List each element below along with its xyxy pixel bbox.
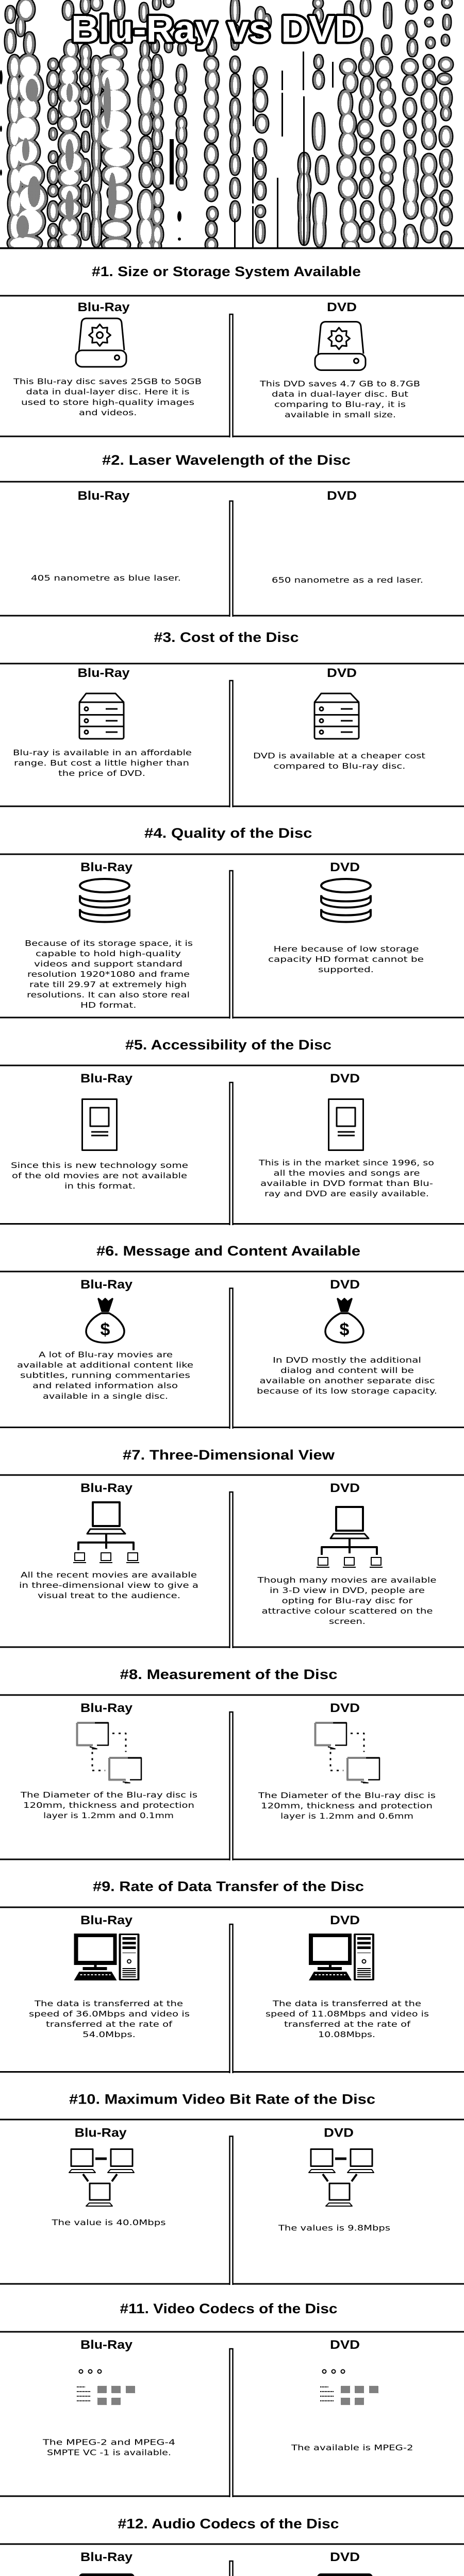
text block: visual treat to the audience.: [38, 1591, 180, 1600]
panel: DVD: [272, 489, 423, 585]
text block: speed of 36.0Mbps and video is: [29, 2009, 190, 2019]
text block: The available is MPEG-2: [291, 2443, 413, 2452]
panel: DVD: [268, 2550, 425, 2576]
heading: #6. Message and Content Available: [96, 1243, 360, 1259]
text block: resolutions. It can also store real: [27, 990, 190, 999]
text block: 120mm, thickness and protection: [23, 1801, 194, 1810]
icon: monitor: [319, 2575, 371, 2576]
text block: The data is transferred at the: [34, 1999, 183, 2008]
panel: Blu-Ray: [31, 2550, 194, 2576]
icon: database: [80, 879, 129, 922]
icon: hard drive: [315, 321, 366, 370]
panel: Blu-Ray: [17, 1278, 193, 1401]
heading: #7. Three-Dimensional View: [123, 1447, 335, 1463]
text block: [259, 379, 420, 419]
text block: capable to hold high-quality: [36, 949, 181, 958]
text block: [253, 751, 425, 771]
text block: supported.: [318, 965, 374, 974]
icon: server: [314, 693, 359, 739]
text block: opting for Blu-ray disc for: [281, 1596, 413, 1605]
section 9: rate of data transfer: [0, 1879, 464, 2073]
text block: [29, 1999, 190, 2039]
text block: 650 nanometre as a red laser.: [272, 575, 423, 585]
column label: Blu-Ray: [80, 1481, 133, 1495]
text block: transferred at the rate of: [284, 2020, 411, 2029]
panel: DVD: [257, 1481, 436, 1626]
text block: available in small size.: [285, 410, 396, 419]
text block: [268, 944, 424, 974]
column label: Blu-Ray: [77, 300, 130, 314]
text block: and related information also: [32, 1381, 178, 1391]
heading: #10. Maximum Video Bit Rate of the Disc: [69, 2092, 375, 2107]
text block: capacity HD format cannot be: [268, 955, 424, 964]
icon: money bag: [86, 1299, 124, 1343]
text block: speed of 11.08Mbps and video is: [266, 2009, 429, 2019]
heading: #8. Measurement of the Disc: [120, 1667, 337, 1682]
hero background texture: [0, 0, 450, 250]
text block: compared to Blu-ray disc.: [273, 761, 405, 771]
text block: Though many movies are available: [257, 1575, 436, 1585]
text block: videos and support standard: [34, 959, 183, 969]
text block: 120mm, thickness and protection: [261, 1801, 433, 1810]
text block: dialog and content will be: [280, 1366, 414, 1375]
text block: available in a single disc.: [43, 1392, 168, 1401]
text block: This is in the market since 1996, so: [258, 1158, 434, 1167]
text block: resolution 1920*1080 and frame: [27, 970, 190, 979]
icon: network tree: [73, 1502, 139, 1563]
text block: layer is 1.2mm and 0.6mm: [280, 1811, 413, 1821]
heading: #5. Accessibility of the Disc: [125, 1037, 332, 1053]
panel: DVD: [253, 666, 425, 771]
column label: DVD: [327, 300, 357, 314]
section 6: message and content: [0, 1243, 464, 1429]
icon: server: [79, 693, 124, 739]
heading: #11. Video Codecs of the Disc: [120, 2301, 337, 2316]
text block: in three-dimensional view to give a: [19, 1581, 198, 1590]
text block: 405 nanometre as blue laser.: [31, 573, 181, 583]
icon: desktop computer: [74, 1934, 139, 1980]
icon: linked monitors: [316, 1723, 379, 1783]
icon: monitor: [80, 2575, 133, 2576]
column label: DVD: [330, 1481, 360, 1495]
text block: in 3-D view in DVD, people are: [270, 1586, 425, 1595]
text block: [25, 939, 193, 1010]
panel: DVD: [268, 860, 424, 974]
text block: [42, 2438, 175, 2458]
hero: noisy blob texture with title: [0, 0, 464, 250]
panel: DVD: [258, 1072, 434, 1198]
text block: all the movies and songs are: [273, 1168, 420, 1178]
panel: Blu-Ray: [31, 489, 181, 583]
text block: available in DVD format than Blu-: [260, 1179, 433, 1188]
column label: Blu-Ray: [80, 1701, 133, 1715]
column label: DVD: [327, 489, 357, 503]
text block: [257, 1575, 436, 1626]
panel: DVD: [258, 1701, 436, 1821]
section 2: laser wavelength: [0, 452, 464, 617]
column label: Blu-Ray: [80, 860, 133, 874]
text block: A lot of Blu-ray movies are: [39, 1350, 173, 1359]
text block: The MPEG-2 and MPEG-4: [42, 2438, 175, 2447]
text block: In DVD mostly the additional: [273, 1355, 421, 1365]
text block: DVD is available at a cheaper cost: [253, 751, 425, 760]
text block: rate till 29.97 at extremely high: [29, 980, 187, 989]
section 12: audio codecs: [0, 2516, 464, 2576]
panel: DVD: [257, 1278, 437, 1396]
section 5: accessibility: [0, 1037, 464, 1225]
text block: [13, 748, 192, 778]
text block: [11, 1161, 188, 1191]
column label: Blu-Ray: [80, 2338, 133, 2352]
text block: SMPTE VC -1 is available.: [47, 2448, 171, 2458]
text block: available on another separate disc: [260, 1376, 435, 1385]
column label: Blu-Ray: [77, 666, 130, 680]
text block: [19, 1570, 198, 1600]
panel: Blu-Ray: [19, 1481, 198, 1600]
panel: Blu-Ray: [13, 666, 192, 778]
text block: HD format.: [80, 1001, 136, 1010]
text block: layer is 1.2mm and 0.1mm: [43, 1811, 174, 1820]
icon: codec window: [77, 2370, 135, 2405]
panel: Blu-Ray: [25, 860, 193, 1010]
panel: Blu-Ray: [13, 300, 202, 417]
icon: database: [321, 879, 371, 922]
icon: linked monitors: [77, 1723, 141, 1783]
text block: comparing to Blu-ray, it is: [274, 400, 406, 409]
column label: DVD: [330, 1701, 360, 1715]
text block: [257, 1355, 437, 1396]
text block: [258, 1158, 434, 1198]
section 11: video codecs: [0, 2301, 464, 2497]
panel: Blu-Ray: [51, 2126, 166, 2227]
column label: DVD: [330, 1913, 360, 1927]
column label: Blu-Ray: [80, 2550, 133, 2564]
panel: DVD: [278, 2126, 390, 2233]
text block: [258, 1791, 436, 1821]
heading: #2. Laser Wavelength of the Disc: [102, 452, 351, 468]
panel: Blu-Ray: [42, 2338, 175, 2458]
text block: 10.08Mbps.: [318, 2030, 375, 2039]
icon: money bag: [325, 1299, 363, 1343]
heading: #1. Size or Storage System Available: [92, 264, 361, 279]
text block: 54.0Mbps.: [82, 2030, 136, 2039]
text block: data in dual-layer disc. Here it is: [26, 387, 190, 397]
column label: Blu-Ray: [77, 489, 130, 503]
column label: DVD: [330, 2550, 360, 2564]
text block: The Diameter of the Blu-ray disc is: [258, 1791, 436, 1800]
section 3: cost: [0, 630, 464, 807]
section 8: measurement: [0, 1667, 464, 1860]
column label: Blu-Ray: [80, 1072, 133, 1086]
text block: data in dual-layer disc. But: [272, 389, 408, 399]
icon: desktop computer: [309, 1934, 374, 1980]
text block: Here because of low storage: [273, 944, 419, 954]
column label: DVD: [330, 2338, 360, 2352]
column label: DVD: [330, 1278, 360, 1292]
section 4: quality: [0, 825, 464, 1019]
text block: The data is transferred at the: [272, 1999, 421, 2008]
icon: tablet: [82, 1099, 117, 1150]
heading: #3. Cost of the Disc: [154, 630, 299, 645]
text block: [17, 1350, 193, 1401]
heading: #4. Quality of the Disc: [144, 825, 312, 841]
text block: [266, 1999, 429, 2039]
column label: Blu-Ray: [75, 2126, 127, 2140]
text block: transferred at the rate of: [46, 2020, 173, 2029]
text block: used to store high-quality images: [21, 398, 194, 407]
text block: and videos.: [79, 408, 137, 417]
section 1: size or storage: [0, 264, 464, 437]
text block: attractive colour scattered on the: [262, 1606, 433, 1616]
icon: codec window: [320, 2370, 378, 2405]
title: Blu-Ray vs DVD: [71, 9, 362, 50]
text block: [13, 377, 202, 417]
column label: Blu-Ray: [80, 1913, 133, 1927]
text block: The Diameter of the Blu-ray disc is: [20, 1790, 197, 1800]
text block: of the old movies are not available: [12, 1171, 187, 1180]
text block: [20, 1790, 197, 1820]
text block: available at additional content like: [17, 1360, 193, 1369]
text block: the price of DVD.: [58, 769, 145, 778]
panel: DVD: [291, 2338, 413, 2452]
column label: DVD: [324, 2126, 354, 2140]
icon: network tree: [317, 1507, 383, 1567]
heading: #9. Rate of Data Transfer of the Disc: [93, 1879, 364, 1894]
text block: Since this is new technology some: [11, 1161, 188, 1170]
text block: Because of its storage space, it is: [25, 939, 193, 948]
section 7: three-dimensional view: [0, 1447, 464, 1648]
text block: This Blu-ray disc saves 25GB to 50GB: [13, 377, 202, 386]
panel: Blu-Ray: [20, 1701, 197, 1820]
text block: subtitles, running commentaries: [20, 1371, 190, 1380]
column label: DVD: [330, 1072, 360, 1086]
panel: Blu-Ray: [11, 1072, 188, 1191]
panel: DVD: [266, 1913, 429, 2039]
icon: tablet: [329, 1099, 363, 1150]
text block: Blu-ray is available in an affordable: [13, 748, 192, 757]
heading: #12. Audio Codecs of the Disc: [118, 2516, 339, 2532]
text block: This DVD saves 4.7 GB to 8.7GB: [259, 379, 420, 388]
text block: because of its low storage capacity.: [257, 1386, 437, 1396]
icon: hard drive: [76, 318, 126, 367]
text block: The values is 9.8Mbps: [278, 2224, 390, 2233]
text block: in this format.: [64, 1181, 136, 1191]
icon: three networked monitors: [309, 2149, 374, 2206]
icon: money bag: $: [101, 1320, 110, 1340]
text block: All the recent movies are available: [21, 1570, 197, 1580]
text block: ray and DVD are easily available.: [264, 1189, 429, 1198]
column label: DVD: [327, 666, 357, 680]
column label: Blu-Ray: [80, 1278, 133, 1292]
panel: DVD: [259, 300, 420, 419]
column label: DVD: [330, 860, 360, 874]
text block: range. But cost a little higher than: [14, 758, 189, 768]
text block: screen.: [329, 1617, 366, 1626]
panel: Blu-Ray: [29, 1913, 190, 2039]
text block: The value is 40.0Mbps: [51, 2218, 166, 2227]
icon: three networked monitors: [69, 2149, 134, 2206]
icon: money bag: $: [340, 1320, 350, 1340]
section 10: maximum video bit rate: [0, 2092, 464, 2285]
